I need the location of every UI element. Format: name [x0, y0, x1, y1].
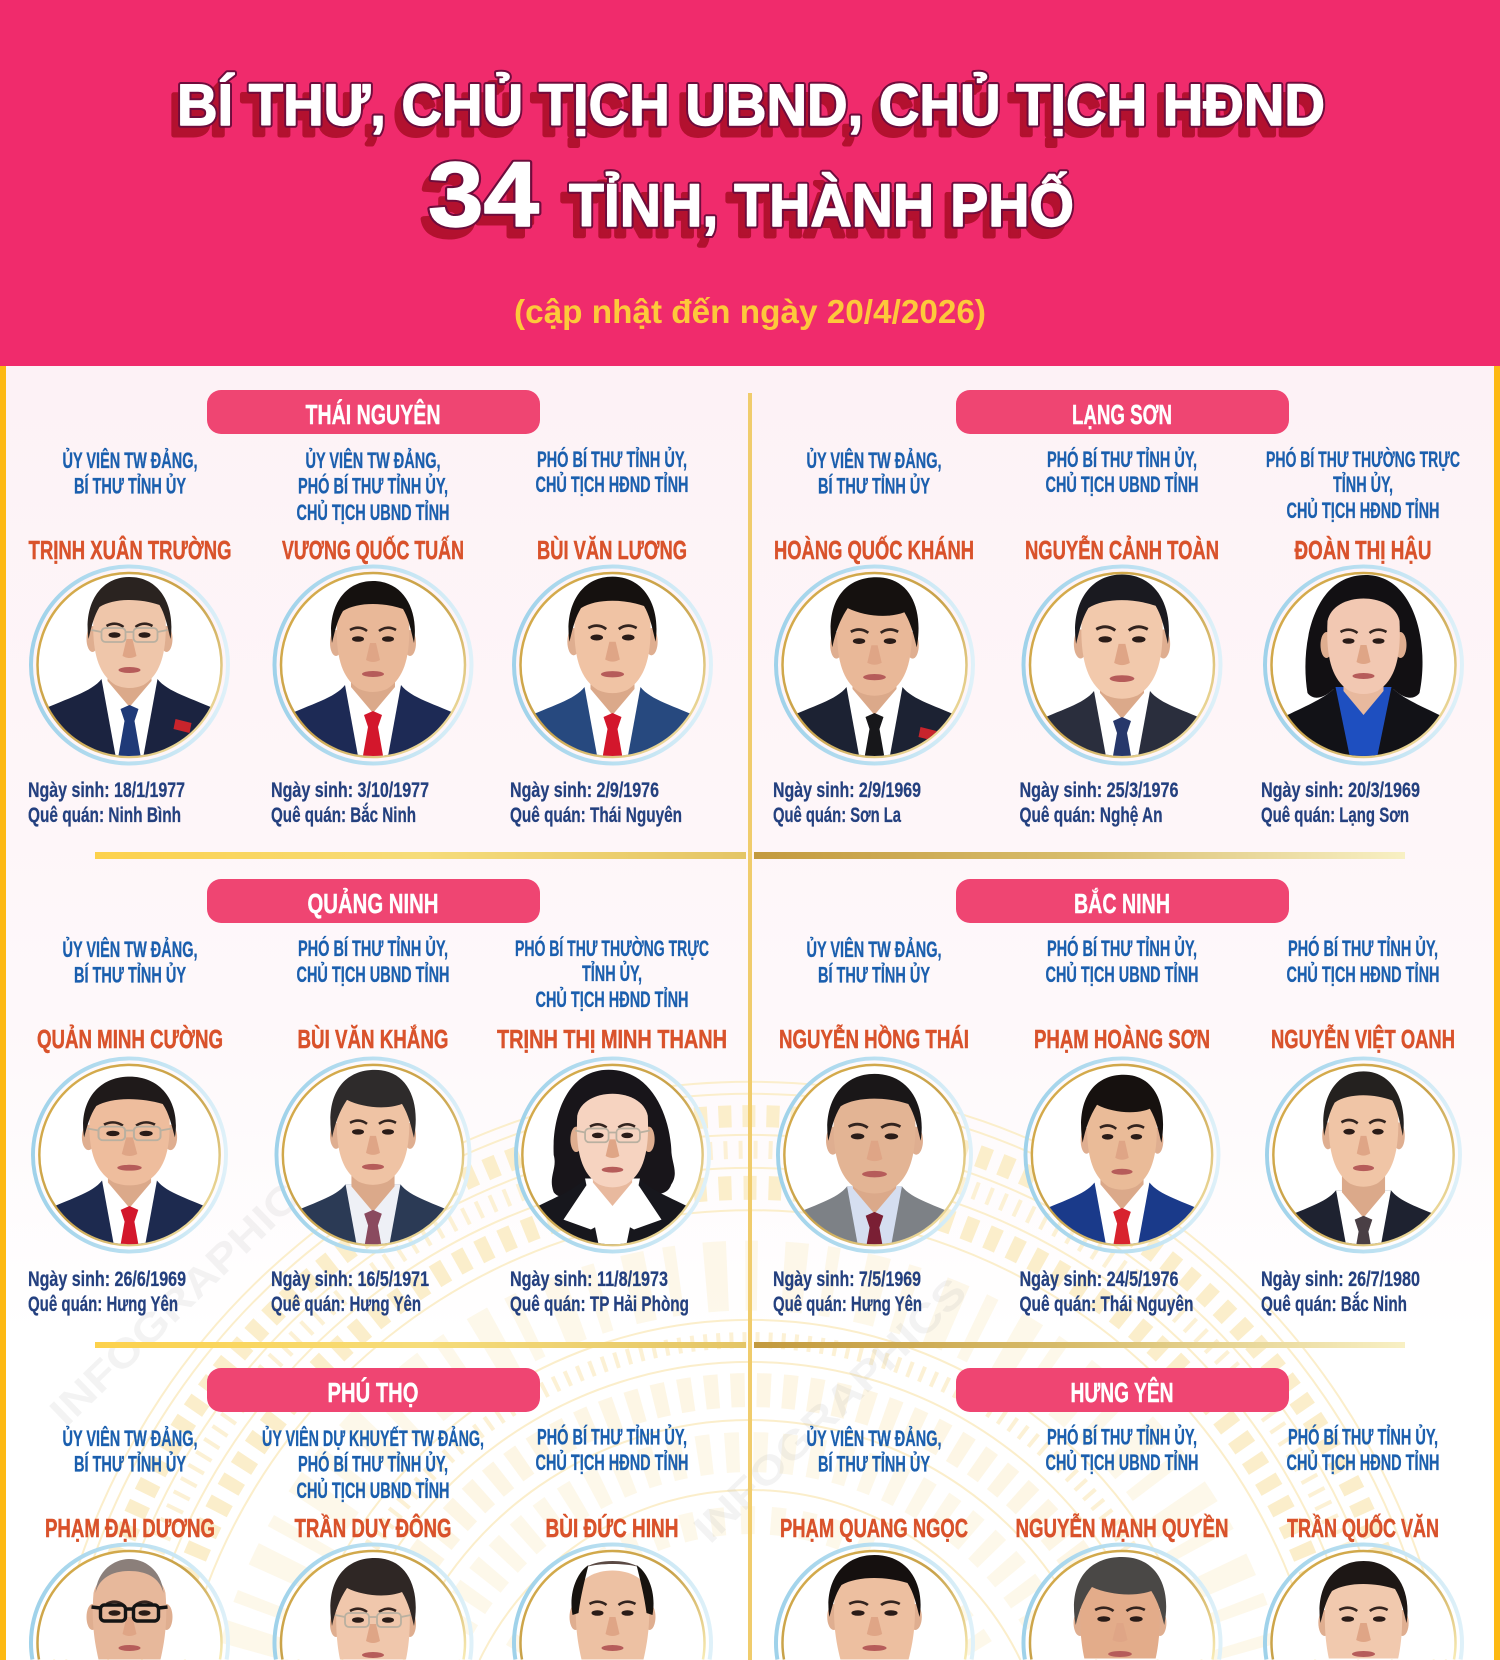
- details: Ngày sinh: 16/5/1971: [271, 1268, 429, 1291]
- role: PHÓ BÍ THƯ TỈNH ỦY,: [537, 1424, 687, 1450]
- role: CHỦ TỊCH HĐND TỈNH: [536, 987, 688, 1012]
- role: CHỦ TỊCH UBND TỈNH: [1046, 472, 1198, 497]
- details: Quê quán: Nghệ An: [1020, 804, 1162, 827]
- details: [1261, 779, 1420, 827]
- name: ĐOÀN THỊ HẬU: [1294, 535, 1432, 565]
- role: CHỦ TỊCH HĐND TỈNH: [536, 472, 688, 497]
- role: CHỦ TỊCH UBND TỈNH: [296, 500, 450, 525]
- title: [170, 73, 1325, 256]
- details: [28, 779, 185, 827]
- name: TRỊNH THỊ MINH THANH: [497, 1024, 727, 1054]
- province pill: THÁI NGUYÊN: [306, 399, 440, 430]
- role: BÍ THƯ TỈNH ỦY: [74, 962, 186, 988]
- role: [1046, 936, 1198, 987]
- vertical divider: [748, 393, 752, 1660]
- portrait: [776, 1544, 973, 1660]
- province pill: LẠNG SƠN: [1072, 399, 1172, 430]
- official: Trịnh Thị Minh Thanh: [497, 936, 727, 1316]
- details: [773, 779, 921, 827]
- role: [515, 936, 709, 1012]
- role: PHÓ BÍ THƯ THƯỜNG TRỰC: [515, 936, 709, 961]
- role: BÍ THƯ TỈNH ỦY: [74, 474, 186, 498]
- role: BÍ THƯ TỈNH ỦY: [74, 1452, 186, 1476]
- title: BÍ THƯ, CHỦ TỊCH UBND, CHỦ TỊCH HĐND: [170, 83, 1318, 148]
- watermark text: INFOGRAPHICS: [42, 1153, 331, 1434]
- role: ỦY VIÊN TW ĐẢNG,: [806, 1426, 942, 1451]
- details: Ngày sinh: 25/3/1976: [1020, 779, 1178, 802]
- province pill: HƯNG YÊN: [1070, 1377, 1174, 1408]
- title: BÍ THƯ, CHỦ TỊCH UBND, CHỦ TỊCH HĐND: [177, 73, 1325, 138]
- name: PHẠM QUANG NGỌC: [780, 1513, 968, 1543]
- official: Đoàn Thị Hậu: [1261, 447, 1462, 827]
- portrait: [1025, 1058, 1219, 1267]
- details: Quê quán: Hưng Yên: [271, 1293, 421, 1316]
- official: Phạm Quang Ngọc: [776, 1426, 973, 1660]
- title: 34: [428, 144, 539, 246]
- portrait: [274, 566, 472, 771]
- name: NGUYỄN MẠNH QUYỀN: [1016, 1513, 1228, 1543]
- details: Quê quán: Hưng Yên: [773, 1293, 922, 1316]
- role: PHÓ BÍ THƯ TỈNH ỦY,: [1047, 1424, 1197, 1450]
- role: [1286, 1424, 1440, 1475]
- name: PHẠM ĐẠI DƯƠNG: [45, 1513, 215, 1543]
- name: VƯƠNG QUỐC TUẤN: [282, 535, 464, 565]
- side border left: [0, 366, 6, 1660]
- official: Bùi Đức Hinh: [514, 1424, 711, 1660]
- name: PHẠM HOÀNG SƠN: [1034, 1024, 1210, 1054]
- title: 34: [428, 144, 539, 246]
- role: CHỦ TỊCH UBND TỈNH: [296, 962, 450, 987]
- portrait: [1024, 566, 1220, 777]
- role: CHỦ TỊCH UBND TỈNH: [1046, 1450, 1198, 1475]
- role: CHỦ TỊCH UBND TỈNH: [296, 1478, 450, 1503]
- role: ỦY VIÊN DỰ KHUYẾT TW ĐẢNG,: [262, 1426, 484, 1451]
- role: PHÓ BÍ THƯ TỈNH ỦY,: [1047, 447, 1197, 472]
- role: [62, 937, 198, 988]
- details: Quê quán: Ninh Bình: [28, 804, 181, 827]
- title: TỈNH, THÀNH PHỐ: [569, 172, 1074, 239]
- details: Ngày sinh: 18/1/1977: [28, 779, 185, 802]
- header band: [0, 0, 1500, 366]
- role: ỦY VIÊN TW ĐẢNG,: [806, 448, 942, 473]
- role: ỦY VIÊN TW ĐẢNG,: [62, 1426, 198, 1451]
- portrait: [1024, 1544, 1220, 1660]
- province pill: [207, 390, 540, 434]
- title: BÍ THƯ, CHỦ TỊCH UBND, CHỦ TỊCH HĐND: [177, 73, 1325, 138]
- details: Ngày sinh: 11/8/1973: [510, 1268, 668, 1291]
- portrait: [31, 1544, 228, 1660]
- details: Ngày sinh: 26/6/1969: [28, 1268, 186, 1291]
- role: PHÓ BÍ THƯ TỈNH ỦY,: [298, 474, 448, 498]
- role: [806, 937, 942, 988]
- panel: Bắc Ninh: [773, 879, 1460, 1316]
- details: Quê quán: Hưng Yên: [28, 1293, 178, 1316]
- province pill: [207, 879, 540, 923]
- name: NGUYỄN HỒNG THÁI: [779, 1024, 969, 1054]
- portrait: [276, 1058, 470, 1269]
- official: Nguyễn Mạnh Quyền: [1016, 1424, 1228, 1660]
- role: BÍ THƯ TỈNH ỦY: [818, 474, 930, 498]
- role: [1286, 936, 1440, 987]
- name: TRẦN QUỐC VĂN: [1287, 1513, 1439, 1543]
- portrait: [1265, 1544, 1462, 1660]
- name: BÙI ĐỨC HINH: [546, 1513, 678, 1543]
- details: Quê quán: Bắc Ninh: [271, 803, 416, 827]
- official: Phạm Hoàng Sơn: [1020, 936, 1219, 1316]
- panel: Lạng Sơn: [773, 390, 1462, 827]
- province pill: [956, 1368, 1289, 1412]
- role: [62, 448, 198, 498]
- details: Ngày sinh: 3/10/1977: [271, 779, 429, 802]
- portrait: [1265, 566, 1462, 769]
- portrait: [776, 566, 973, 773]
- role: [1046, 447, 1198, 497]
- portrait: [1267, 1058, 1460, 1275]
- horizontal divider row 1: [95, 852, 1405, 859]
- portrait: [31, 566, 228, 765]
- details: Quê quán: Bắc Ninh: [1261, 1292, 1407, 1316]
- role: [536, 1424, 688, 1475]
- official: Bùi Văn Lương: [510, 447, 711, 827]
- role: PHÓ BÍ THƯ TỈNH ỦY,: [298, 1452, 448, 1476]
- name: TRỊNH XUÂN TRƯỜNG: [28, 535, 232, 565]
- page background: [0, 366, 1500, 1660]
- role: PHÓ BÍ THƯ TỈNH ỦY,: [1047, 936, 1197, 961]
- details: Ngày sinh: 20/3/1969: [1261, 779, 1420, 802]
- details: Quê quán: Sơn La: [773, 804, 901, 827]
- role: [1046, 1424, 1198, 1475]
- role: [806, 448, 942, 498]
- details: Ngày sinh: 26/7/1980: [1261, 1268, 1420, 1291]
- name: NGUYỄN CẢNH TOÀN: [1025, 535, 1219, 565]
- panel: Quảng Ninh: [28, 879, 727, 1316]
- panel: Phú Thọ: [31, 1368, 711, 1660]
- details: [1020, 1268, 1194, 1316]
- portrait: [514, 1544, 711, 1660]
- role: BÍ THƯ TỈNH ỦY: [818, 1452, 930, 1476]
- title: TỈNH, THÀNH PHỐ: [569, 172, 1074, 239]
- official: Nguyễn Cảnh Toàn: [1020, 447, 1220, 827]
- panel: Hưng Yên: [776, 1368, 1462, 1660]
- role: CHỦ TỊCH HĐND TỈNH: [536, 1450, 688, 1475]
- name: TRẦN DUY ĐÔNG: [294, 1513, 452, 1543]
- details: Ngày sinh: 2/9/1976: [510, 779, 659, 802]
- portrait: [778, 1058, 971, 1271]
- role: PHÓ BÍ THƯ TỈNH ỦY,: [298, 936, 448, 961]
- details: [510, 779, 682, 827]
- official: Bùi Văn Khẳng: [271, 936, 470, 1316]
- title: 34: [421, 154, 532, 256]
- role: CHỦ TỊCH UBND TỈNH: [1046, 962, 1198, 987]
- official: Quản Minh Cường: [28, 937, 226, 1316]
- details: [1261, 1268, 1420, 1316]
- official: Vương Quốc Tuấn: [271, 448, 472, 827]
- province pill: [207, 1368, 540, 1412]
- name: QUẢN MINH CƯỜNG: [37, 1024, 223, 1054]
- role: PHÓ BÍ THƯ TỈNH ỦY,: [537, 447, 687, 472]
- province pill: [956, 390, 1289, 434]
- details: Quê quán: TP Hải Phòng: [510, 1293, 689, 1316]
- watermark text: INFOGRAPHICS: [686, 1270, 975, 1551]
- province pill: [956, 879, 1289, 923]
- official: Nguyễn Hồng Thái: [773, 937, 971, 1316]
- details: Quê quán: Thái Nguyên: [1020, 1293, 1194, 1316]
- role: [296, 448, 450, 525]
- watermark text: [42, 1153, 975, 1551]
- official: Hoàng Quốc Khánh: [773, 448, 974, 827]
- official: Trần Duy Đông: [262, 1426, 484, 1660]
- official: Trần Quốc Văn: [1265, 1424, 1462, 1660]
- name: BÙI VĂN LƯƠNG: [537, 535, 687, 565]
- role: ỦY VIÊN TW ĐẢNG,: [62, 448, 198, 473]
- role: BÍ THƯ TỈNH ỦY: [818, 962, 930, 988]
- role: ỦY VIÊN TW ĐẢNG,: [306, 448, 440, 473]
- portrait: [514, 566, 711, 773]
- role: [62, 1426, 198, 1476]
- name: HOÀNG QUỐC KHÁNH: [774, 535, 974, 565]
- province pill: PHÚ THỌ: [328, 1377, 418, 1408]
- portrait: [274, 1544, 472, 1660]
- name: BÙI VĂN KHẮNG: [298, 1024, 448, 1054]
- role: [806, 1426, 942, 1476]
- drum watermark pattern: [54, 1082, 1446, 1660]
- role: TỈNH ỦY,: [582, 961, 642, 986]
- role: ỦY VIÊN TW ĐẢNG,: [806, 937, 942, 962]
- details: [28, 1268, 186, 1316]
- details: [773, 1268, 922, 1316]
- role: TỈNH ỦY,: [1333, 472, 1393, 497]
- role: [1266, 447, 1460, 523]
- title: TỈNH, THÀNH PHỐ: [562, 182, 1067, 249]
- subtitle: (cập nhật đến ngày 20/4/2026): [514, 293, 986, 330]
- details: Ngày sinh: 7/5/1969: [773, 1268, 921, 1291]
- role: [262, 1426, 484, 1503]
- official: Nguyễn Việt Oanh: [1261, 936, 1460, 1316]
- role: [536, 447, 688, 497]
- details: [271, 1268, 429, 1316]
- portrait: [33, 1058, 226, 1265]
- role: [296, 936, 450, 987]
- details: [1020, 779, 1178, 827]
- role: ỦY VIÊN TW ĐẢNG,: [62, 937, 198, 962]
- details: Ngày sinh: 24/5/1976: [1020, 1268, 1178, 1291]
- details: Ngày sinh: 2/9/1969: [773, 779, 921, 802]
- province pill: QUẢNG NINH: [308, 887, 438, 919]
- province pill: BẮC NINH: [1074, 888, 1170, 919]
- details: [510, 1268, 689, 1316]
- official: Phạm Đại Dương: [31, 1426, 228, 1660]
- panel: Thái Nguyên: [28, 390, 711, 827]
- details: [271, 779, 429, 827]
- details: Quê quán: Thái Nguyên: [510, 804, 682, 827]
- details: Quê quán: Lạng Sơn: [1261, 804, 1409, 827]
- side border right: [1494, 366, 1500, 1660]
- horizontal divider row 2: [95, 1342, 1405, 1348]
- portrait: [516, 1058, 709, 1259]
- official: Trịnh Xuân Trường: [28, 448, 232, 827]
